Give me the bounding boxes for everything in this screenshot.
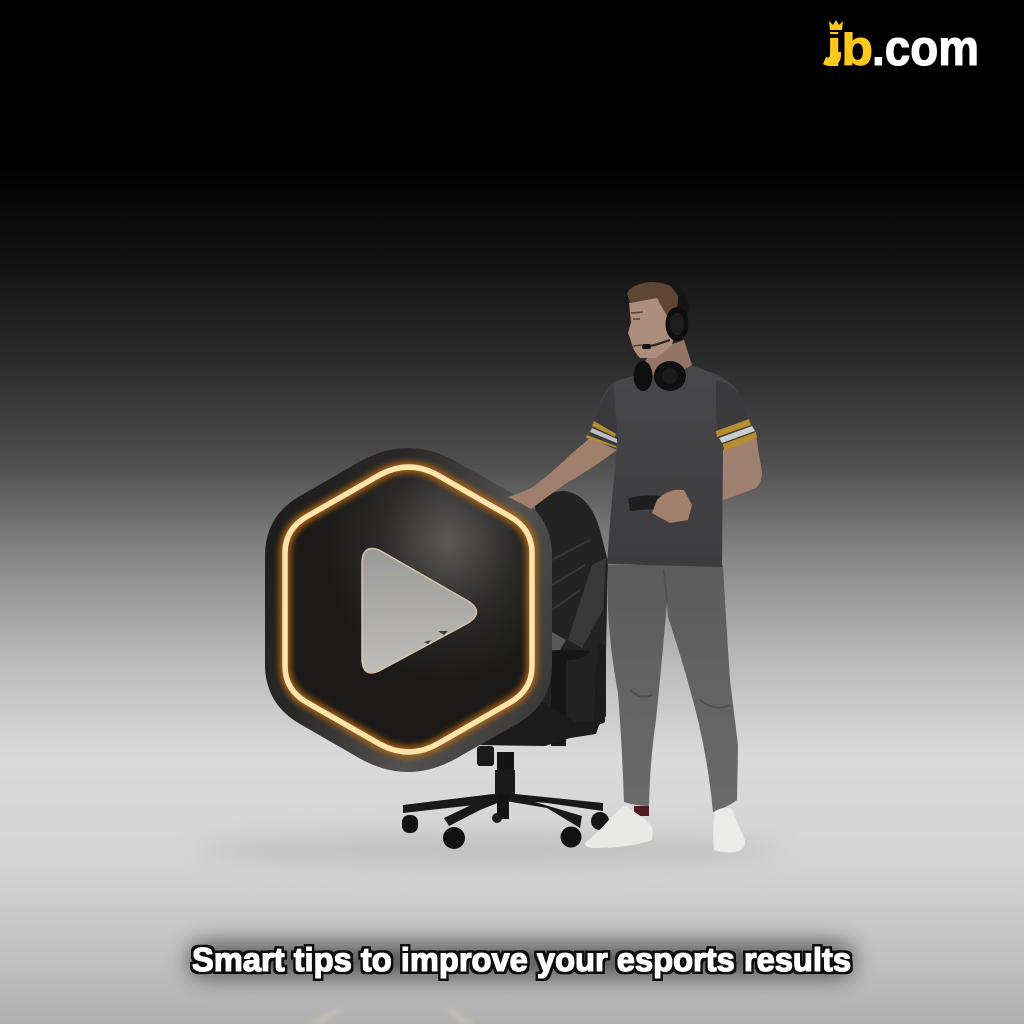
gaming chair	[402, 491, 609, 849]
star base	[403, 794, 493, 813]
trousers	[608, 565, 738, 812]
chair seat	[476, 700, 600, 746]
logo wordmark .com: .com	[872, 20, 979, 76]
armrest	[552, 650, 590, 662]
hand resting on badge	[508, 487, 543, 509]
face	[628, 296, 678, 358]
left shoe	[585, 805, 653, 848]
sock	[634, 806, 649, 816]
viewer-right arm	[650, 436, 762, 523]
right shoe	[713, 808, 745, 852]
caption: Smart tips to improve your esports results	[192, 941, 851, 978]
facial features	[631, 312, 643, 346]
floor shadow	[200, 836, 780, 864]
logo wordmark jb: jb	[826, 20, 873, 76]
brand logo	[823, 20, 977, 66]
headset on head	[668, 282, 689, 320]
faint floor reflections	[308, 1008, 474, 1024]
hair	[627, 282, 680, 320]
sleeve stripes	[716, 419, 757, 451]
person with headset and controller	[508, 282, 762, 852]
microphone boom	[645, 340, 670, 347]
hexagon play badge	[265, 448, 552, 772]
neck	[640, 340, 692, 378]
controller	[628, 495, 672, 511]
headset around neck	[634, 361, 652, 391]
logo crown	[829, 20, 843, 30]
neon ring	[285, 467, 532, 752]
caption shadow	[190, 944, 852, 976]
casters	[402, 815, 418, 833]
badge body	[265, 448, 552, 772]
hand on controller	[652, 490, 692, 523]
logo hook	[823, 52, 841, 66]
amber glow	[285, 467, 532, 752]
t-shirt	[587, 365, 757, 567]
badge face	[285, 467, 532, 752]
chair back	[535, 491, 608, 740]
gas lift	[477, 746, 494, 766]
viewer-left arm	[508, 438, 617, 508]
specks in cutout	[424, 631, 448, 644]
play triangle cutout	[362, 548, 476, 673]
